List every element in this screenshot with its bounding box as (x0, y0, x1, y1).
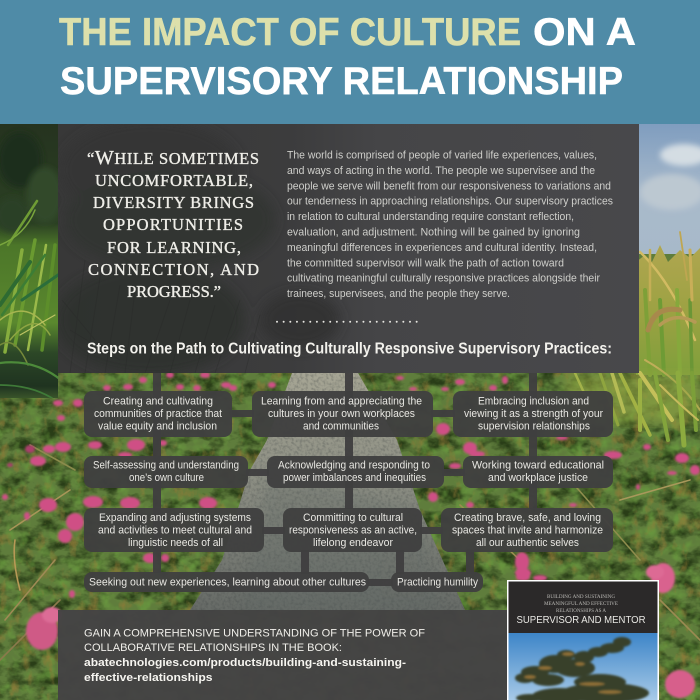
step: power imbalances (267, 456, 444, 488)
body paragraph: our tenderness in approaching relationships. Our supervisory practices (287, 196, 613, 208)
step: committing to responsiveness: responsiveness as an active, (289, 524, 417, 536)
body paragraph: people we serve will benefit from our responsiveness to variations and (287, 180, 611, 192)
body paragraph: The world is comprised of people of varied life experiences, values, (287, 150, 597, 162)
step: communities of practice: value equity and inclusion (98, 420, 217, 432)
flower bed texture (0, 373, 700, 700)
body paragraph: in relation to cultural understanding require constant reflection, (287, 211, 574, 223)
title: THE IMPACT OF CULTURE (59, 11, 521, 54)
step: new experiences (84, 572, 369, 592)
step: communities of practice: communities of practice that (94, 408, 222, 420)
tall blades right (565, 373, 700, 423)
pull quote (87, 147, 259, 301)
body paragraph: the committed supervisor will walk the path of action toward (287, 257, 564, 269)
step: committing to responsiveness: lifelong endeavor (313, 537, 393, 549)
body paragraph: cultivating meaningful culturally responsive practices alongside their (287, 273, 600, 285)
step: brave spaces (441, 508, 613, 552)
step: learning from workplaces: Learning from and appreciating the (261, 396, 422, 408)
title: ON A (533, 11, 636, 54)
pull quote: PROGRESS.” (127, 282, 221, 301)
step: self-assessing: Self-assessing and understanding (93, 460, 239, 472)
book title: BUILDING AND SUSTAINING (547, 594, 615, 600)
panel: introduction (55, 120, 639, 375)
book title (516, 594, 646, 626)
panel: book call to action (58, 610, 508, 700)
step: expanding systems (84, 508, 264, 552)
step: communities of practice: Creating and cultivating (103, 396, 213, 408)
step: self-assessing: one’s own culture (129, 472, 204, 484)
step: embracing inclusion: supervision relationships (478, 420, 590, 432)
step: expanding systems: linguistic needs of all (128, 537, 223, 549)
step: new experiences: Seeking out new experiences, learning about other cultures (89, 576, 366, 588)
body paragraph: evaluation, and adjustment. Nothing will be gained by ignoring (287, 226, 580, 238)
step: expanding systems: and activities to meet cultural and (98, 524, 252, 536)
connector lines between steps (153, 373, 537, 586)
step: embracing inclusion: Embracing inclusion and (478, 396, 589, 408)
step: brave spaces: spaces that invite and harmonize (452, 524, 603, 536)
book title: MEANINGFUL AND EFFECTIVE (544, 601, 618, 607)
panel: book call to action: abatechnologies.com/products/building-and-sustaining- (84, 657, 407, 669)
title: SUPERVISORY RELATIONSHIP (60, 60, 623, 103)
step: power imbalances: Acknowledging and responding to (278, 460, 430, 472)
step: committing to responsiveness: Committing to cultural (303, 512, 403, 524)
steps heading: Steps on the Path to Cultivating Culturally Responsive Supervisory Practices: (87, 340, 612, 357)
step: expanding systems: Expanding and adjusting systems (99, 512, 251, 524)
step: learning from workplaces (252, 391, 433, 437)
header band (0, 0, 700, 124)
book tree illustration (515, 637, 649, 700)
title (59, 11, 636, 103)
panel: book call to action: effective-relationships (84, 672, 213, 684)
body paragraph: meaningful differences in experiences and cultural identity. Instead, (287, 242, 597, 254)
book title: SUPERVISOR AND MENTOR (516, 615, 646, 626)
book title: RELATIONSHIPS AS A (556, 608, 606, 614)
step: humility (391, 572, 483, 592)
foliage stems (0, 445, 700, 660)
pavement path (190, 373, 465, 610)
body paragraph (287, 150, 613, 300)
step: humility: Practicing humility (397, 576, 479, 588)
pull quote: DIVERSITY BRINGS (93, 193, 254, 212)
body paragraph: trainees, supervisees, and the people they serve. (287, 288, 510, 300)
pull quote: UNCOMFORTABLE, (95, 171, 253, 190)
step: embracing inclusion (453, 391, 613, 437)
sky (636, 124, 700, 254)
body paragraph: and ways of acting in the world. The people we supervisee and the (287, 165, 595, 177)
step: embracing inclusion: viewing it as a strength of your (464, 408, 603, 420)
rice field right (636, 245, 700, 375)
step: brave spaces: Creating brave, safe, and loving (454, 512, 601, 524)
step: committing to responsiveness (283, 508, 422, 552)
step: learning from workplaces: and communities (303, 420, 379, 432)
pull quote: “WHILE SOMETIMES (87, 147, 259, 169)
pink flowers (2, 372, 700, 698)
step: self-assessing (84, 456, 248, 488)
pull quote: CONNECTION, AND (88, 260, 259, 279)
step: brave spaces: all our authentic selves (476, 537, 579, 549)
step: justice: Working toward educational (472, 460, 604, 472)
pull quote: OPPORTUNITIES (103, 215, 243, 234)
step: power imbalances: power imbalances and inequities (283, 472, 426, 484)
panel: book call to action: GAIN A COMPREHENSIVE UNDERSTANDING OF THE POWER OF (84, 628, 426, 640)
step: justice (463, 456, 613, 488)
book cover (507, 580, 659, 700)
panel: book call to action: COLLABORATIVE RELATIONSHIPS IN THE BOOK: (84, 642, 342, 654)
pull quote: FOR LEARNING, (107, 238, 241, 257)
step: justice: and workplace justice (488, 472, 588, 484)
step: communities of practice (84, 391, 232, 437)
step: learning from workplaces: cultures in your own workplaces (268, 408, 415, 420)
